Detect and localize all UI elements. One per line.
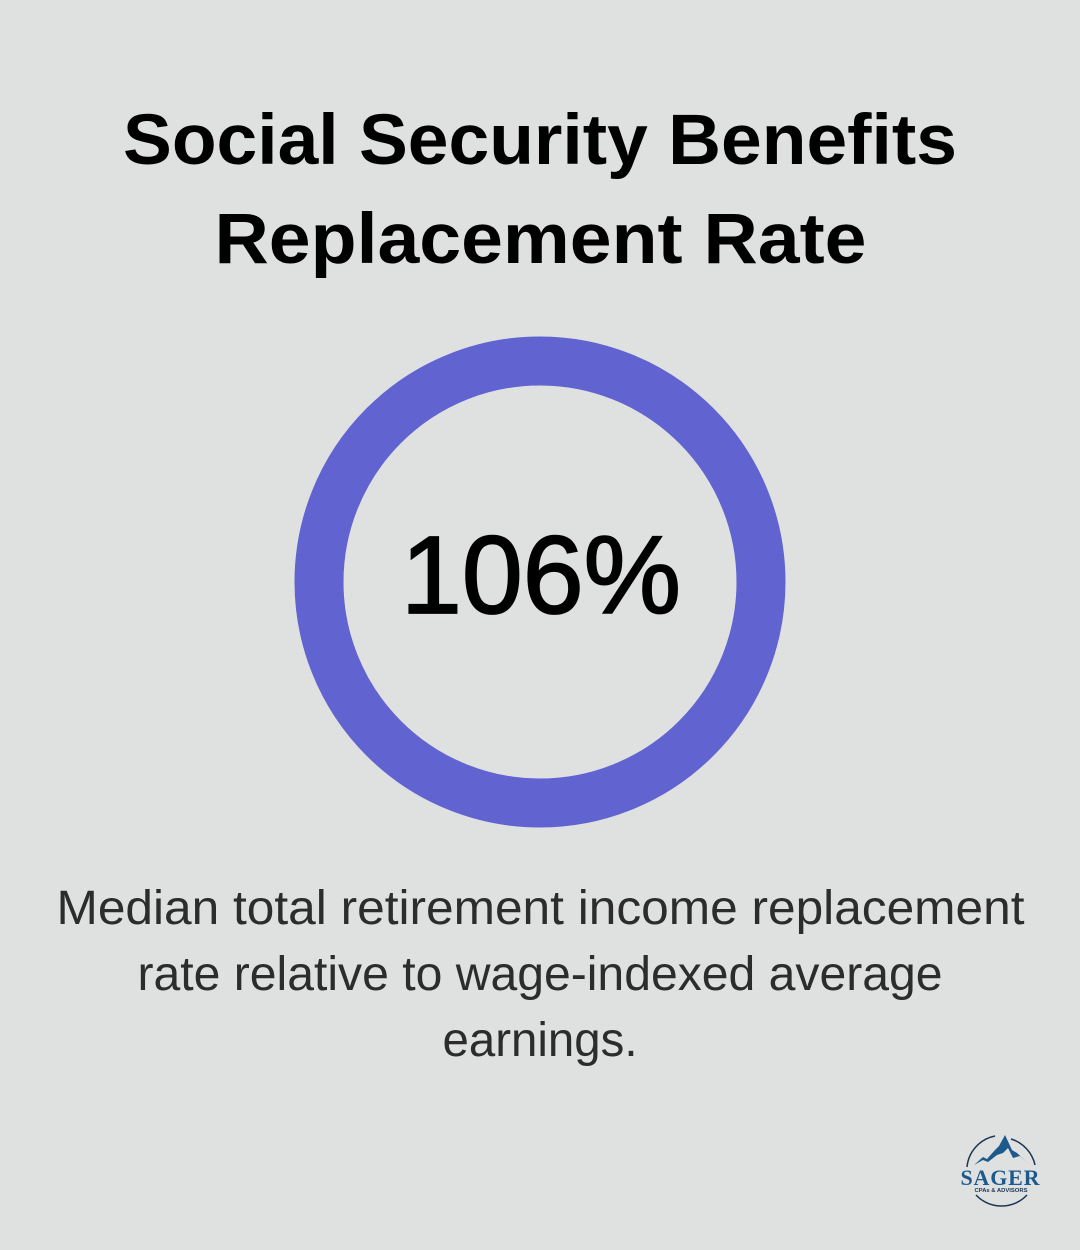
- title: [123, 101, 957, 279]
- title: Replacement Rate: [214, 200, 866, 279]
- ring: [319, 361, 761, 803]
- logo: Sager CPAs & Advisors: [960, 1135, 1041, 1206]
- logo wordmark: SAGER: [960, 1165, 1041, 1190]
- description: earnings.: [442, 1014, 638, 1067]
- value: 106%: 106%: [401, 514, 681, 637]
- logo mountain: [974, 1135, 1030, 1165]
- ring chart with value: [319, 361, 761, 803]
- description: [56, 882, 1024, 1067]
- description: Median total retirement income replacement: [56, 882, 1024, 935]
- title: Social Security Benefits: [123, 101, 957, 180]
- logo ring arcs: [967, 1136, 995, 1167]
- logo tagline: CPAs & ADVISORS: [974, 1188, 1028, 1194]
- description: rate relative to wage-indexed average: [138, 948, 942, 1001]
